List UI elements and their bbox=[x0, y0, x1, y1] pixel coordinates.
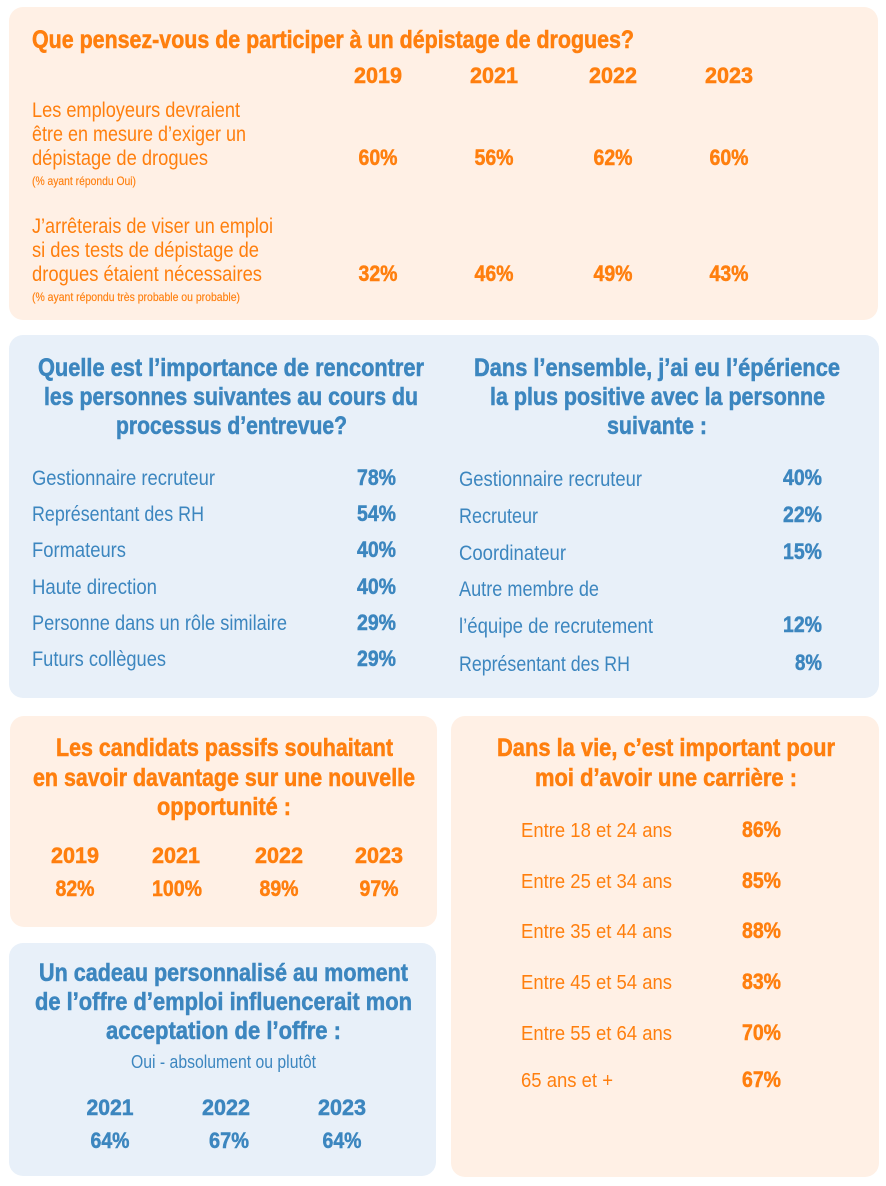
age group values bbox=[742, 817, 781, 1092]
heading: most positive experience: suivante : bbox=[607, 412, 707, 440]
heading: passive candidates: opportunité : bbox=[157, 793, 291, 821]
year headers: 2022 bbox=[589, 63, 637, 88]
list: importance values bbox=[357, 465, 396, 671]
statement: would stop pursuing a job: J’arrêterais de viser un emploi bbox=[32, 215, 273, 238]
age group labels: Entre 55 et 64 ans bbox=[521, 1023, 672, 1045]
age group labels: Entre 25 et 34 ans bbox=[521, 871, 672, 893]
list: importance labels: Personne dans un rôle similaire bbox=[32, 612, 287, 635]
values: 64% bbox=[90, 1128, 130, 1153]
list: positive experience labels: Coordinateur bbox=[459, 542, 566, 565]
heading: passive candidates: en savoir davantage sur une nouvelle bbox=[33, 764, 415, 792]
heading: passive candidates: Les candidats passifs souhaitant bbox=[56, 734, 394, 762]
heading: importance of meeting people: les personnes suivantes au cours du bbox=[44, 383, 418, 411]
statement: employers should require testing: Les employeurs devraient bbox=[32, 99, 240, 122]
list: positive experience values: 22% bbox=[783, 502, 822, 527]
list: importance values: 29% bbox=[357, 610, 396, 635]
list: positive experience values: 15% bbox=[783, 539, 822, 564]
year headers: 2019 bbox=[51, 843, 99, 868]
year headers: 2023 bbox=[355, 843, 403, 868]
list: positive experience values: 8% bbox=[795, 650, 822, 675]
values: employers row: 60% bbox=[710, 145, 748, 170]
age group values: 86% bbox=[742, 817, 781, 842]
age group labels: Entre 35 et 44 ans bbox=[521, 921, 672, 943]
year headers: 2021 bbox=[152, 843, 200, 868]
list: positive experience values: 40% bbox=[783, 465, 822, 490]
age group values: 83% bbox=[742, 969, 781, 994]
age group values: 85% bbox=[742, 868, 781, 893]
values: stop pursuing row: 43% bbox=[710, 261, 748, 286]
values: 97% bbox=[360, 876, 398, 901]
list: importance labels: Futurs collègues bbox=[32, 648, 166, 671]
age group labels: Entre 45 et 54 ans bbox=[521, 972, 672, 994]
heading: most positive experience: Dans l’ensemble, j’ai eu l’épérience bbox=[474, 354, 840, 382]
panel: passive candidates bbox=[10, 716, 437, 927]
age group labels bbox=[521, 820, 672, 1092]
panel: personalized gift bbox=[9, 943, 436, 1176]
values: employers row: 56% bbox=[474, 145, 514, 170]
year headers: 2021 bbox=[86, 1095, 134, 1120]
year headers bbox=[354, 63, 753, 88]
list: positive experience labels bbox=[459, 468, 653, 676]
values: stop pursuing row bbox=[358, 261, 748, 286]
year headers: 2023 bbox=[705, 63, 753, 88]
values: 67% bbox=[209, 1128, 249, 1153]
statement: employers should require testing bbox=[32, 99, 246, 188]
year headers bbox=[51, 843, 403, 868]
heading: importance of meeting people: processus d’entrevue? bbox=[116, 412, 347, 440]
list: positive experience labels: Autre membre de bbox=[459, 578, 599, 601]
year headers bbox=[86, 1095, 366, 1120]
heading: personalized gift: Un cadeau personnalisé au moment bbox=[39, 959, 409, 987]
heading: most positive experience: la plus positive avec la personne bbox=[490, 383, 825, 411]
statement: employers should require testing: être en mesure d’exiger un bbox=[32, 123, 246, 146]
list: importance values: 40% bbox=[357, 574, 396, 599]
year headers: 2022 bbox=[202, 1095, 250, 1120]
list: importance values: 40% bbox=[357, 537, 396, 562]
age group values: 70% bbox=[742, 1020, 781, 1045]
age group values: 88% bbox=[742, 918, 781, 943]
statement: would stop pursuing a job: si des tests de dépistage de bbox=[32, 239, 259, 262]
age group labels: Entre 18 et 24 ans bbox=[521, 820, 672, 842]
values: stop pursuing row: 32% bbox=[358, 261, 398, 286]
panel: drug testing opinions bbox=[9, 7, 878, 320]
year headers: 2023 bbox=[318, 1095, 366, 1120]
list: importance labels: Haute direction bbox=[32, 576, 157, 599]
list: positive experience labels: Représentant des RH bbox=[459, 653, 630, 676]
list: importance labels: Représentant des RH bbox=[32, 503, 204, 526]
statement: would stop pursuing a job bbox=[32, 215, 273, 304]
list: positive experience labels: Recruteur bbox=[459, 505, 538, 528]
list: importance values: 78% bbox=[357, 465, 396, 490]
year headers: 2021 bbox=[470, 63, 518, 88]
panel: career importance by age bbox=[451, 716, 879, 1177]
heading: career importance: moi d’avoir une carrière : bbox=[535, 764, 797, 792]
panel: interview meetings bbox=[9, 335, 879, 698]
list: importance labels: Formateurs bbox=[32, 539, 126, 562]
heading: career importance bbox=[497, 734, 835, 792]
values: 89% bbox=[260, 876, 298, 901]
list: positive experience labels: l’équipe de recrutement bbox=[459, 615, 653, 638]
year headers: 2019 bbox=[354, 63, 402, 88]
values: 64% bbox=[322, 1128, 362, 1153]
heading: drug testing: Que pensez-vous de participer à un dépistage de drogues? bbox=[32, 26, 634, 54]
list: positive experience labels: Gestionnaire recruteur bbox=[459, 468, 642, 491]
values: 100% bbox=[152, 876, 202, 901]
year headers: 2022 bbox=[255, 843, 303, 868]
heading: passive candidates bbox=[33, 734, 415, 821]
statement: employers should require testing: (% ayant répondu Oui) bbox=[32, 174, 136, 188]
values bbox=[90, 1128, 362, 1153]
values bbox=[56, 876, 398, 901]
statement: employers should require testing: dépistage de drogues bbox=[32, 147, 208, 170]
list: importance values: 54% bbox=[357, 501, 396, 526]
values: employers row bbox=[358, 145, 748, 170]
age group labels: 65 ans et + bbox=[521, 1070, 613, 1092]
age group values: 67% bbox=[742, 1067, 781, 1092]
heading: personalized gift: de l’offre d’emploi influencerait mon bbox=[35, 988, 412, 1016]
list: positive experience values: 12% bbox=[783, 612, 822, 637]
heading: importance of meeting people bbox=[38, 354, 424, 440]
list: importance labels: Gestionnaire recruteur bbox=[32, 467, 215, 490]
heading: personalized gift: acceptation de l’offre : bbox=[106, 1017, 341, 1045]
heading: most positive experience bbox=[474, 354, 840, 440]
subtitle: Oui - absolument ou plutôt bbox=[131, 1052, 316, 1072]
statement: would stop pursuing a job: drogues étaient nécessaires bbox=[32, 263, 262, 286]
heading: importance of meeting people: Quelle est l’importance de rencontrer bbox=[38, 354, 424, 382]
values: stop pursuing row: 46% bbox=[474, 261, 514, 286]
list: importance labels bbox=[32, 467, 287, 671]
values: 82% bbox=[56, 876, 94, 901]
values: employers row: 62% bbox=[594, 145, 632, 170]
values: employers row: 60% bbox=[358, 145, 398, 170]
heading: personalized gift bbox=[35, 959, 412, 1045]
values: stop pursuing row: 49% bbox=[594, 261, 632, 286]
list: positive experience values bbox=[783, 465, 822, 675]
list: importance values: 29% bbox=[357, 646, 396, 671]
statement: would stop pursuing a job: (% ayant répondu très probable ou probable) bbox=[32, 290, 240, 304]
heading: career importance: Dans la vie, c’est important pour bbox=[497, 734, 835, 762]
